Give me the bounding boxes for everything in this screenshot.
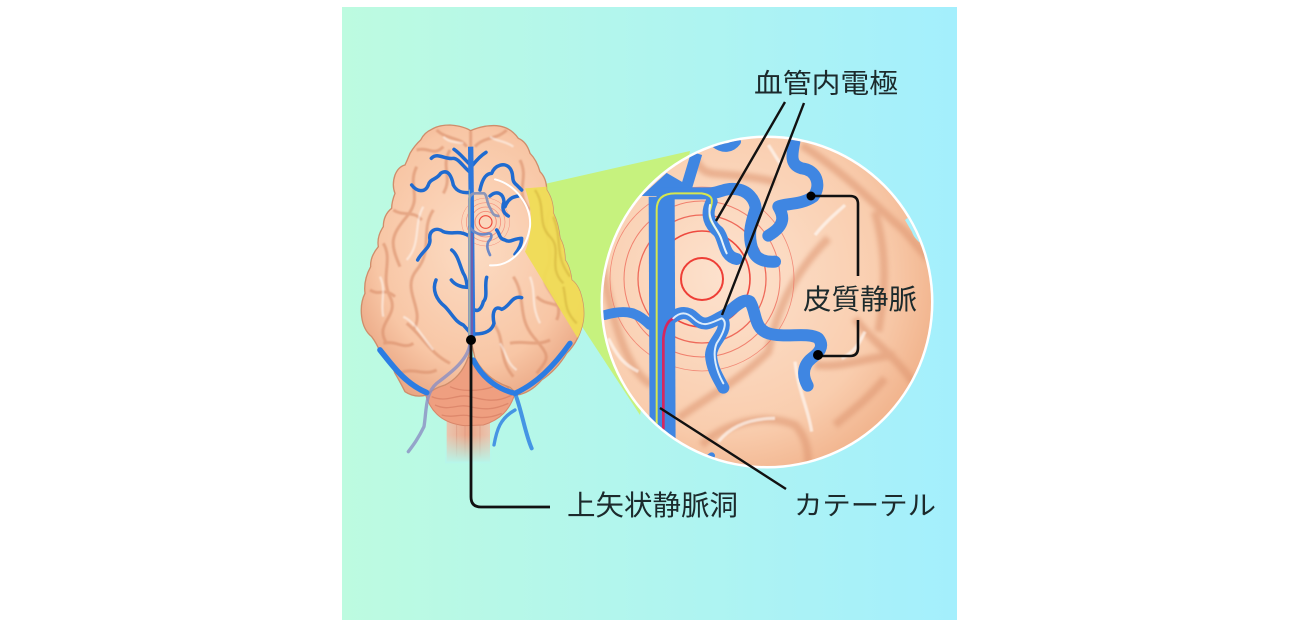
seizure rings large [610, 187, 794, 371]
cortical folds [370, 130, 567, 377]
veins in lens [605, 142, 821, 458]
callout: 上矢状静脈洞 [466, 335, 738, 521]
catheter and electrodes in lens [657, 193, 727, 428]
white lens arc [490, 179, 530, 265]
callout: カテーテル: カテーテル [794, 491, 936, 521]
callout: 上矢状静脈洞: 上矢状静脈洞 [567, 490, 738, 521]
magnified lens [600, 136, 960, 468]
cerebrum [361, 125, 584, 396]
background panel [342, 7, 957, 620]
brain folds in lens [602, 145, 928, 465]
callout: 血管内電極: 血管内電極 [754, 69, 898, 99]
cortical veins [412, 149, 522, 334]
callout: カテーテル [660, 408, 936, 521]
callout: 皮質静脈 [803, 192, 917, 360]
seizure rings small [462, 198, 510, 246]
brain illustration [361, 125, 590, 463]
callout: 血管内電極 [716, 69, 898, 315]
callout: 皮質静脈: 皮質静脈 [803, 284, 917, 315]
cerebellum [425, 357, 515, 426]
background notch at lens edge [905, 218, 920, 243]
yellow highlighted region [525, 186, 584, 338]
catheter lines [408, 190, 498, 452]
zoom projection cone [527, 151, 690, 415]
transverse sinuses and neck veins [380, 343, 570, 448]
brain stem [445, 420, 492, 463]
superior sagittal sinus [471, 147, 473, 337]
